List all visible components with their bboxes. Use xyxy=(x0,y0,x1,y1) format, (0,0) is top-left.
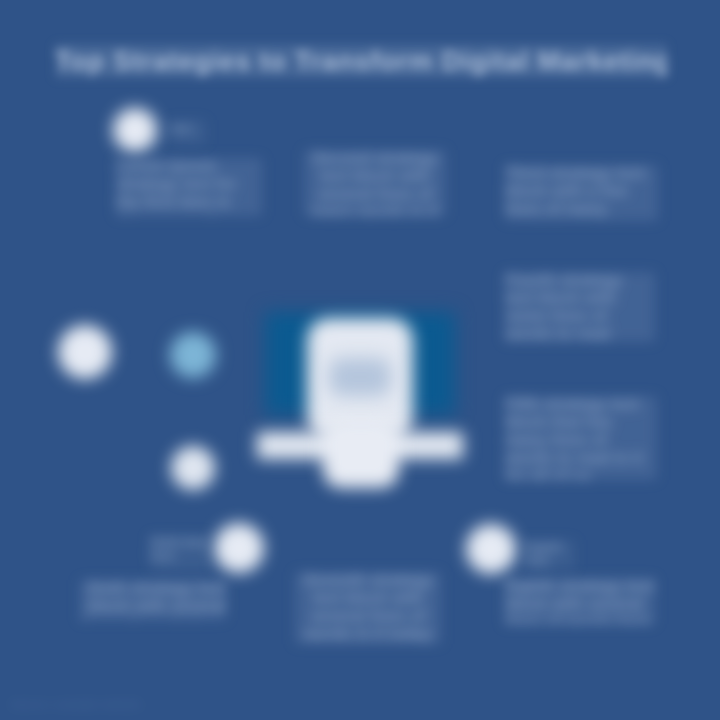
base xyxy=(323,420,399,488)
icon: bottom left circle xyxy=(214,523,264,573)
white body xyxy=(307,318,413,440)
title: Top Strategies to Transform Digital Marketing xyxy=(55,46,667,76)
icon: lower left circle xyxy=(171,446,215,490)
central illustration xyxy=(245,304,475,500)
horizontal bar xyxy=(257,432,463,459)
text label: bottom right: Eighth item xyxy=(525,540,562,568)
text label: bottom left: Sixth item here xyxy=(150,535,207,563)
icon: left circle xyxy=(58,325,112,379)
icon: teal circle xyxy=(170,332,216,378)
inner mark xyxy=(329,358,391,396)
text label: bottom right xyxy=(525,540,575,570)
icon: bottom right circle xyxy=(466,524,516,574)
text label: top left xyxy=(170,120,206,144)
footer source: Source: example website xyxy=(10,699,141,711)
dark panel xyxy=(265,312,455,415)
icon: top left circle xyxy=(113,108,157,152)
